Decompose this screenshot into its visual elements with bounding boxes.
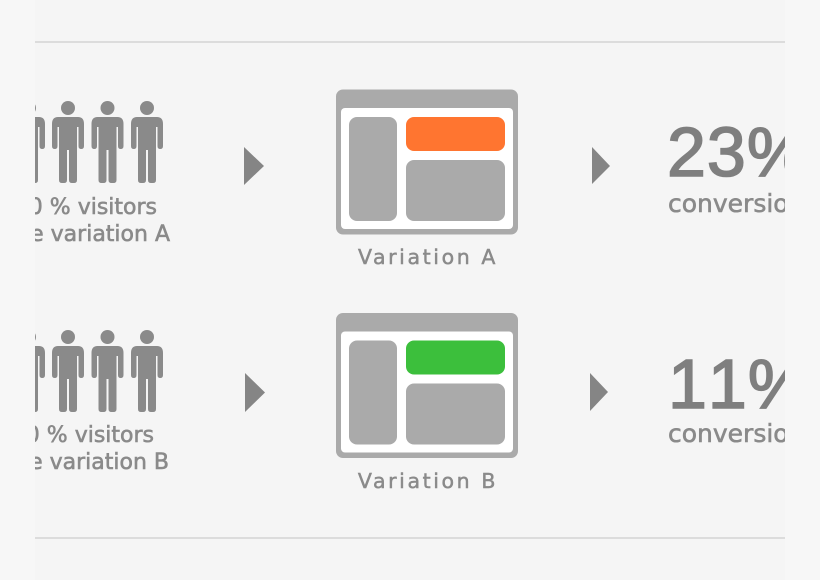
- icon: page layout variation B: [336, 313, 518, 458]
- arrow: variation B to result: [590, 373, 608, 411]
- stat: 11% conversion: conversion: [668, 419, 804, 448]
- text: visitors caption B: see variation B: [4, 450, 169, 475]
- text: visitors caption B: [35, 424, 168, 470]
- row: variation B: [4, 313, 811, 493]
- arrow: visitors to variation A: [244, 147, 264, 185]
- label: Variation A: Variation A: [358, 245, 498, 269]
- text: visitors caption B: 50 % visitors: [12, 423, 154, 448]
- row: variation A: [5, 90, 810, 269]
- text: visitors caption A: 50 % visitors: [15, 195, 157, 220]
- stat: 23% conversion: [669, 126, 785, 212]
- text: visitors caption A: see variation A: [5, 222, 170, 247]
- stat: 23% conversion: 23%: [667, 113, 810, 191]
- bottom divider line: [35, 537, 785, 539]
- text: visitors caption A: [35, 196, 170, 242]
- icon: page layout variation A: [336, 90, 518, 234]
- label: Variation B: Variation B: [358, 469, 498, 493]
- icon: group of visitors A: [35, 101, 163, 183]
- stat: 23% conversion: conversion: [668, 189, 804, 218]
- arrow: visitors to variation B: [245, 373, 265, 412]
- stat: 11% conversion: 11%: [668, 345, 811, 423]
- icon: group of visitors B: [35, 330, 163, 412]
- stat: 11% conversion: [669, 359, 785, 442]
- arrow: variation A to result: [592, 147, 610, 184]
- top divider line: [35, 41, 785, 43]
